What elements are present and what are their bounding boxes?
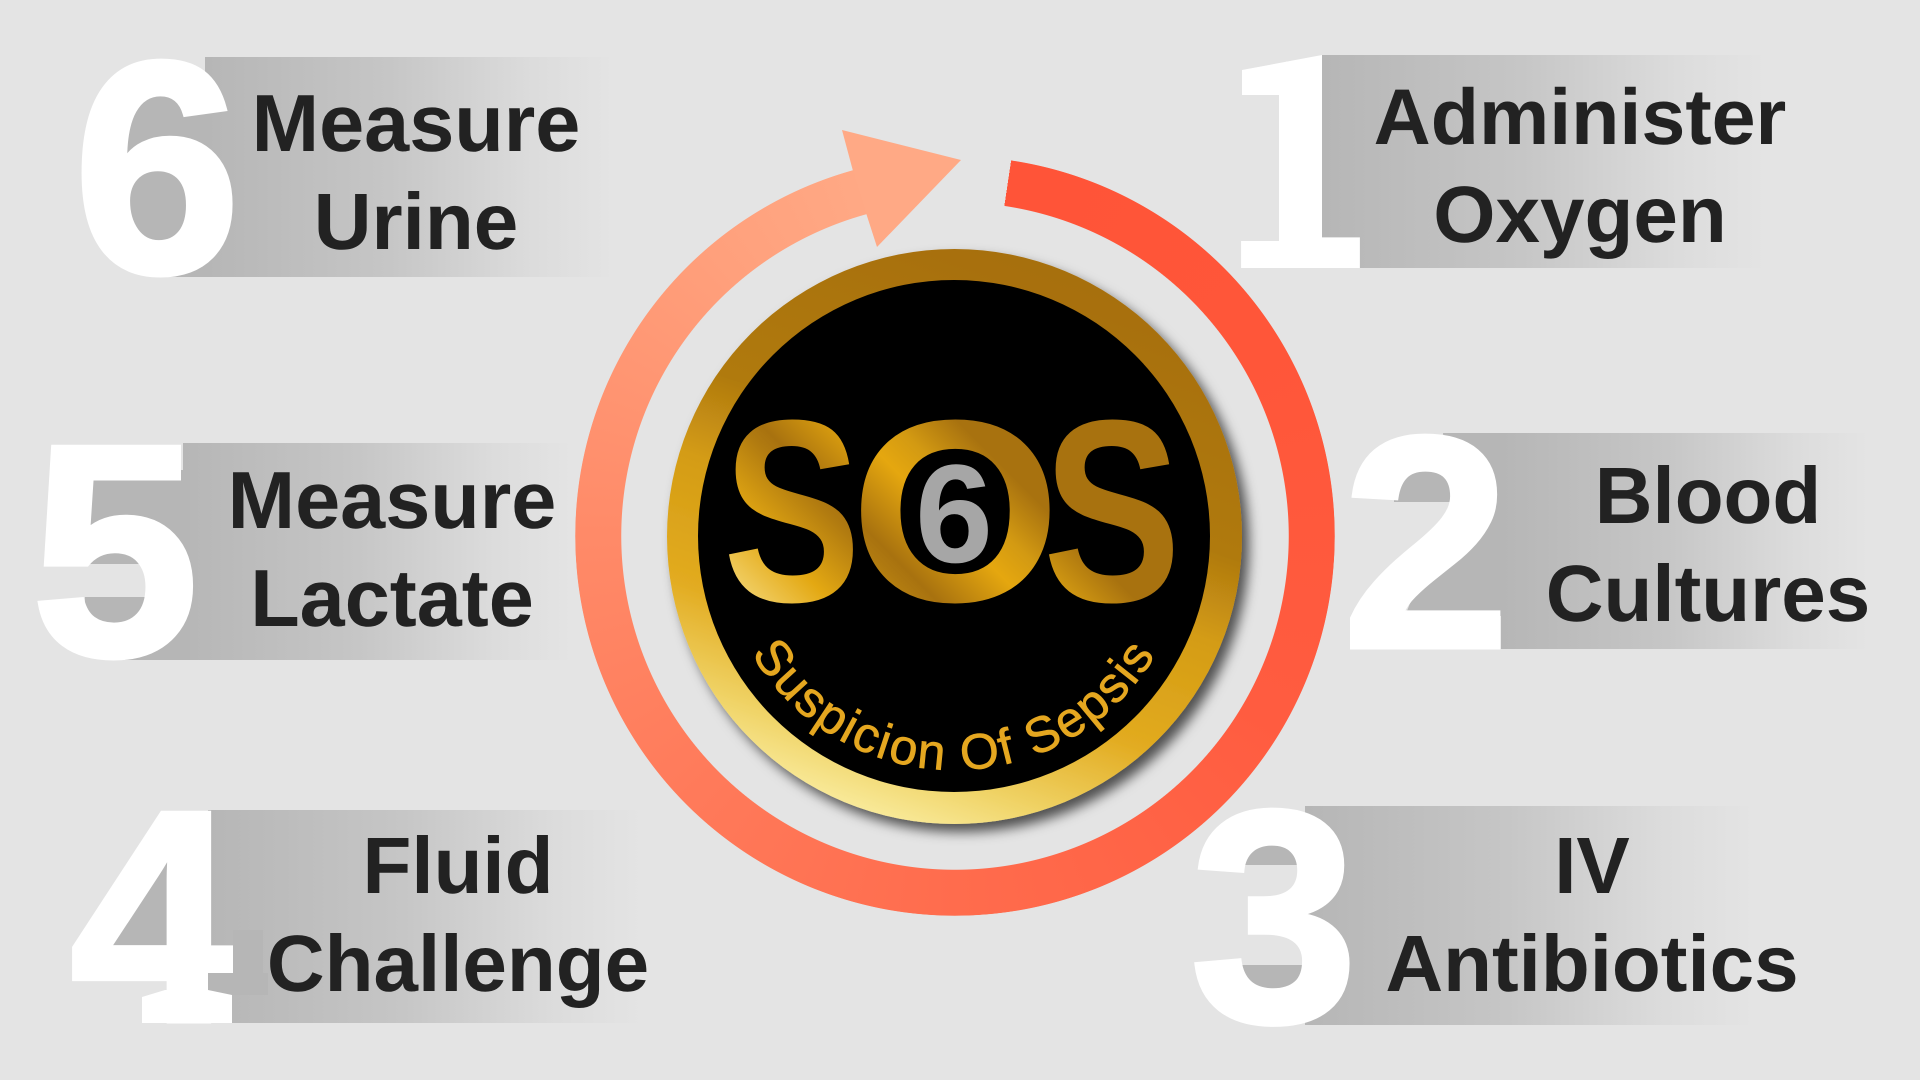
step 2: blood cultures: Cultures bbox=[1546, 549, 1870, 638]
step 1: administer oxygen bbox=[1225, 0, 1786, 332]
label: IV bbox=[1554, 821, 1630, 910]
label: Blood bbox=[1595, 451, 1821, 540]
SOS coin badge bbox=[665, 248, 1258, 841]
label: Administer bbox=[1374, 72, 1786, 161]
number 5: 5 bbox=[31, 382, 199, 719]
SOS lettering: S bbox=[1043, 367, 1181, 657]
coin black face bbox=[698, 280, 1210, 792]
number 6: 6 bbox=[73, 0, 241, 336]
step 6: measure urine bbox=[73, 0, 615, 336]
number 4: 4 bbox=[70, 748, 240, 1080]
label: Fluid bbox=[362, 821, 554, 910]
curved tagline: Suspicion Of Sepsis bbox=[756, 640, 1152, 770]
step 5: measure lactate bbox=[31, 382, 573, 719]
SOS lettering: O bbox=[850, 367, 1061, 657]
step 4: fluid challenge: Challenge bbox=[267, 919, 649, 1008]
step 3: iv antibiotics bbox=[1190, 748, 1799, 1080]
coin gold rim bbox=[667, 249, 1242, 824]
band bbox=[1322, 55, 1767, 268]
circular ring bbox=[575, 156, 1335, 916]
SOS lettering: S bbox=[723, 367, 861, 657]
band bbox=[208, 810, 643, 1023]
step 3: iv antibiotics: Antibiotics bbox=[1385, 919, 1799, 1008]
band bbox=[183, 443, 573, 660]
number 1: 1 bbox=[1225, 0, 1367, 332]
step 5: measure lactate: Lactate bbox=[250, 554, 534, 644]
number 2: 2 bbox=[1342, 374, 1510, 711]
band bbox=[1305, 806, 1755, 1025]
arrow head bbox=[842, 130, 961, 247]
step 4: fluid challenge bbox=[70, 748, 649, 1080]
inner number six: 6 bbox=[915, 435, 993, 592]
step 1: administer oxygen: Oxygen bbox=[1433, 170, 1727, 259]
number 3: 3 bbox=[1190, 748, 1358, 1080]
step 2: blood cultures bbox=[1342, 374, 1870, 711]
band bbox=[205, 57, 615, 277]
step 6: measure urine: Urine bbox=[314, 177, 518, 266]
counter of four bbox=[112, 860, 168, 945]
band bbox=[1501, 433, 1870, 649]
label: Measure bbox=[228, 456, 556, 546]
label: Measure bbox=[252, 79, 580, 169]
SOS lettering bbox=[723, 367, 1181, 657]
